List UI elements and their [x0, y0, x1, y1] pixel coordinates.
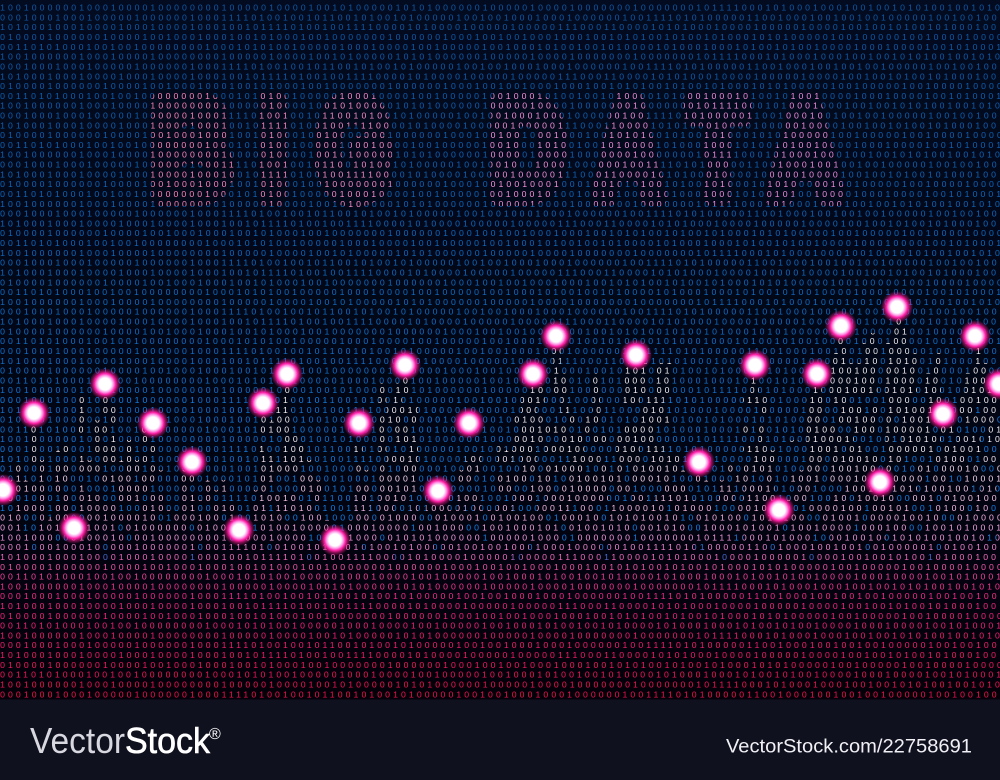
- binary digit matrix with hidden BIG DATA letters and column chart: 0001000100010000010000001000111101001001011001010010100000100100100010001000000100111101010000011001000100100100100000100100100: [0, 307, 1000, 317]
- binary digit matrix with hidden BIG DATA letters and column chart: 0100001000000100001001000100010010100010010000000100000010001001001000100010010101001010010100010101000001001000001001000010000: [0, 366, 1000, 376]
- binary digit matrix with hidden BIG DATA letters and column chart: 0001000100010000010000001000111101001001011001010010100000100100100010001000000100111101010000011001000100100100100000100100100: [0, 640, 1000, 650]
- binary digit matrix with hidden BIG DATA letters and column chart: 0011010100010010010000000010001010100100000100010000100100000100100010100100101000010100010001010010100100001000100001001010001: [0, 91, 1000, 101]
- footer band: [0, 700, 1000, 780]
- binary digit matrix with hidden BIG DATA letters and column chart: 0001000100010000010000001000111101001001011001010010100000100100100010001000000100111101010000011001000100100100100000100100100: [0, 591, 1000, 601]
- binary digit matrix with hidden BIG DATA letters and column chart: 0011010100010010010000000010001010100100000100010000100100000100100010100100101000010100010001010010100100001000100001001010001: [0, 670, 1000, 680]
- binary digit matrix with hidden BIG DATA letters and column chart: 1001000000100010000100000000100000100001001010000010101000000100000100001000000010000000101111000101000100010010010101001001010: [0, 297, 1000, 307]
- binary digit matrix with hidden BIG DATA letters and column chart: 1010001000100001000100001000100101111010010011110000101000010000010000011100011000010101000100001000001000010010010100101000100: [0, 71, 999, 81]
- binary digit matrix with hidden BIG DATA letters and column chart: 1001000000100010000100000000100000100001001010000010101000000100000100001000000010000000101111000101000100010010010101001001010: [0, 483, 1000, 493]
- binary digit matrix with hidden BIG DATA letters and column chart: 0100001000000100001001000100010010100010010000000100000010001001001000100010010101001010010100010101000001001000001001000010000: [0, 562, 1000, 572]
- binary digit matrix with hidden BIG DATA letters and column chart: 0001000100010000010000001000111101001001011001010010100000100100100010001000000100111101010000011001000100100100100000100100100: [0, 444, 1000, 454]
- binary digit matrix with hidden BIG DATA letters and column chart: 1010001000100001000100001000100101111010010011110000101000010000010000011100011000010101000100001000001000010010010100101000100: [0, 218, 999, 228]
- binary digit matrix with hidden BIG DATA letters and column chart: 1010001000100001000100001000100101111010010011110000101000010000010000011100011000010101000100001000001000010010010100101000100: [0, 356, 999, 366]
- binary digit matrix with hidden BIG DATA letters and column chart: 1010001000100001000100001000100101111010010011110000101000010000010000011100011000010101000100001000001000010010010100101000100: [0, 454, 999, 464]
- image id URL: VectorStock.com/22758691: [726, 736, 972, 758]
- binary digit matrix with hidden BIG DATA letters and column chart: 1001000000100010000100000000100000100001001010000010101000000100000100001000000010000000101111000101000100010010010101001001010: [0, 248, 1000, 258]
- binary digit matrix with hidden BIG DATA letters and column chart: 0001000100010000010000001000111101001001011001010010100000100100100010001000000100111101010000011001000100100100100000100100100: [0, 160, 1000, 170]
- binary digit matrix with hidden BIG DATA letters and column chart: 0001000100010000010000001000111101001001011001010010100000100100100010001000000100111101010000011001000100100100100000100100100: [0, 542, 1000, 552]
- binary digit matrix with hidden BIG DATA letters and column chart: 0001000100010000010000001000111101001001011001010010100000100100100010001000000100111101010000011001000100100100100000100100100: [0, 12, 1000, 22]
- binary digit matrix with hidden BIG DATA letters and column chart: 1010001000100001000100001000100101111010010011110000101000010000010000011100011000010101000100001000001000010010010100101000100: [0, 650, 999, 660]
- VectorStock logo: Vector: [30, 720, 125, 761]
- binary digit matrix with hidden BIG DATA letters and column chart: 1001000000100010000100000000100000100001001010000010101000000100000100001000000010000000101111000101000100010010010101001001010: [0, 532, 1000, 542]
- binary digit matrix with hidden BIG DATA letters and column chart: 0011010100010010010000000010001010100100000100010000100100000100100010100100101000010100010001010010100100001000100001001010001: [0, 424, 1000, 434]
- binary digit matrix with hidden BIG DATA letters and column chart: 1001000000100010000100000000100000100001001010000010101000000100000100001000000010000000101111000101000100010010010101001001010: [0, 199, 1000, 209]
- binary digit matrix with hidden BIG DATA letters and column chart: 1001000000100010000100000000100000100001001010000010101000000100000100001000000010000000101111000101000100010010010101001001010: [0, 630, 1000, 640]
- binary digit matrix with hidden BIG DATA letters and column chart: 1001000000100010000100000000100000100001001010000010101000000100000100001000000010000000101111000101000100010010010101001001010: [0, 679, 1000, 689]
- binary digit matrix with hidden BIG DATA letters and column chart: 0001000100010000010000001000111101001001011001010010100000100100100010001000000100111101010000011001000100100100100000100100100: [0, 61, 1000, 71]
- binary digit matrix with hidden BIG DATA letters and column chart: 0011010100010010010000000010001010100100000100010000100100000100100010100100101000010100010001010010100100001000100001001010001: [0, 287, 1000, 297]
- binary digit matrix with hidden BIG DATA letters and column chart: 0100001000000100001001000100010010100010010000000100000010001001001000100010010101001010010100010101000001001000001001000010000: [0, 513, 1000, 523]
- binary digit matrix with hidden BIG DATA letters and column chart: 0001000100010000010000001000111101001001011001010010100000100100100010001000000100111101010000011001000100100100100000100100100: [0, 209, 1000, 219]
- binary digit matrix with hidden BIG DATA letters and column chart: 0011010100010010010000000010001010100100000100010000100100000100100010100100101000010100010001010010100100001000100001001010001: [0, 572, 1000, 582]
- binary digit matrix with hidden BIG DATA letters and column chart: 1010001000100001000100001000100101111010010011110000101000010000010000011100011000010101000100001000001000010010010100101000100: [0, 317, 999, 327]
- binary digit matrix with hidden BIG DATA letters and column chart: 0100001000000100001001000100010010100010010000000100000010001001001000100010010101001010010100010101000001001000001001000010000: [0, 179, 1000, 189]
- VectorStock logo: ®: [209, 726, 221, 743]
- binary digit matrix with hidden BIG DATA letters and column chart: 1010001000100001000100001000100101111010010011110000101000010000010000011100011000010101000100001000001000010010010100101000100: [0, 405, 999, 415]
- binary digit matrix with hidden BIG DATA letters and column chart: 0001000100010000010000001000111101001001011001010010100000100100100010001000000100111101010000011001000100100100100000100100100: [0, 689, 1000, 699]
- binary digit matrix with hidden BIG DATA letters and column chart: 1001000000100010000100000000100000100001001010000010101000000100000100001000000010000000101111000101000100010010010101001001010: [0, 434, 1000, 444]
- binary digit matrix with hidden BIG DATA letters and column chart: 0001000100010000010000001000111101001001011001010010100000100100100010001000000100111101010000011001000100100100100000100100100: [0, 493, 1000, 503]
- binary digit matrix with hidden BIG DATA letters and column chart: 0100001000000100001001000100010010100010010000000100000010001001001000100010010101001010010100010101000001001000001001000010000: [0, 660, 1000, 670]
- binary digit matrix with hidden BIG DATA letters and column chart: 0011010100010010010000000010001010100100000100010000100100000100100010100100101000010100010001010010100100001000100001001010001: [0, 473, 1000, 483]
- binary digit matrix with hidden BIG DATA letters and column chart: 1010001000100001000100001000100101111010010011110000101000010000010000011100011000010101000100001000001000010010010100101000100: [0, 601, 999, 611]
- binary digit matrix with hidden BIG DATA letters and column chart: 0011010100010010010000000010001010100100000100010000100100000100100010100100101000010100010001010010100100001000100001001010001: [0, 523, 1000, 533]
- binary digit matrix with hidden BIG DATA letters and column chart: 1010001000100001000100001000100101111010010011110000101000010000010000011100011000010101000100001000001000010010010100101000100: [0, 267, 999, 277]
- binary digit matrix with hidden BIG DATA letters and column chart: 1010001000100001000100001000100101111010010011110000101000010000010000011100011000010101000100001000001000010010010100101000100: [0, 22, 999, 32]
- binary digit matrix with hidden BIG DATA letters and column chart: 0100001000000100001001000100010010100010010000000100000010001001001000100010010101001010010100010101000001001000001001000010000: [0, 415, 1000, 425]
- binary digit matrix with hidden BIG DATA letters and column chart: 0100001000000100001001000100010010100010010000000100000010001001001000100010010101001010010100010101000001001000001001000010000: [0, 81, 1000, 91]
- binary digit matrix with hidden BIG DATA letters and column chart: 1010001000100001000100001000100101111010010011110000101000010000010000011100011000010101000100001000001000010010010100101000100: [0, 503, 999, 513]
- binary digit matrix with hidden BIG DATA letters and column chart: 0001000100010000010000001000111101001001011001010010100000100100100010001000000100111101010000011001000100100100100000100100100: [0, 346, 1000, 356]
- binary digit matrix with hidden BIG DATA letters and column chart: 0001000100010000010000001000111101001001011001010010100000100100100010001000000100111101010000011001000100100100100000100100100: [0, 111, 1000, 121]
- binary digit matrix with hidden BIG DATA letters and column chart: 1001000000100010000100000000100000100001001010000010101000000100000100001000000010000000101111000101000100010010010101001001010: [0, 385, 1000, 395]
- VectorStock logo: [30, 720, 221, 761]
- binary digit matrix with hidden BIG DATA letters and column chart: 1010001000100001000100001000100101111010010011110000101000010000010000011100011000010101000100001000001000010010010100101000100: [0, 169, 999, 179]
- binary digit matrix with hidden BIG DATA letters and column chart: 1010001000100001000100001000100101111010010011110000101000010000010000011100011000010101000100001000001000010010010100101000100: [0, 120, 999, 130]
- binary digit matrix with hidden BIG DATA letters and column chart: 1001000000100010000100000000100000100001001010000010101000000100000100001000000010000000101111000101000100010010010101001001010: [0, 150, 1000, 160]
- VectorStock logo: Stock: [125, 720, 211, 761]
- binary digit matrix with hidden BIG DATA letters and column chart: 0011010100010010010000000010001010100100000100010000100100000100100010100100101000010100010001010010100100001000100001001010001: [0, 621, 1000, 631]
- binary digit matrix with hidden BIG DATA letters and column chart: 0001000100010000010000001000111101001001011001010010100000100100100010001000000100111101010000011001000100100100100000100100100: [0, 258, 1000, 268]
- binary digit matrix with hidden BIG DATA letters and column chart: 0100001000000100001001000100010010100010010000000100000010001001001000100010010101001010010100010101000001001000001001000010000: [0, 326, 1000, 336]
- binary digit matrix with hidden BIG DATA letters and column chart: 0001000100010000010000001000111101001001011001010010100000100100100010001000000100111101010000011001000100100100100000100100100: [0, 395, 1000, 405]
- binary digit matrix with hidden BIG DATA letters and column chart: 0100001000000100001001000100010010100010010000000100000010001001001000100010010101001010010100010101000001001000001001000010000: [0, 277, 1000, 287]
- binary digit matrix with hidden BIG DATA letters and column chart: 0011010100010010010000000010001010100100000100010000100100000100100010100100101000010100010001010010100100001000100001001010001: [0, 336, 1000, 346]
- binary digit matrix with hidden BIG DATA letters and column chart: 1001000000100010000100000000100000100001001010000010101000000100000100001000000010000000101111000101000100010010010101001001010: [0, 581, 1000, 591]
- binary digit matrix with hidden BIG DATA letters and column chart: 1001000000100010000100000000100000100001001010000010101000000100000100001000000010000000101111000101000100010010010101001001010: [0, 3, 1000, 13]
- binary digit matrix with hidden BIG DATA letters and column chart: 0011010100010010010000000010001010100100000100010000100100000100100010100100101000010100010001010010100100001000100001001010001: [0, 42, 1000, 52]
- binary digit matrix with hidden BIG DATA letters and column chart: 0100001000000100001001000100010010100010010000000100000010001001001000100010010101001010010100010101000001001000001001000010000: [0, 611, 1000, 621]
- binary digit matrix with hidden BIG DATA letters and column chart: 0100001000000100001001000100010010100010010000000100000010001001001000100010010101001010010100010101000001001000001001000010000: [0, 32, 1000, 42]
- binary digit matrix with hidden BIG DATA letters and column chart: 0100001000000100001001000100010010100010010000000100000010001001001000100010010101001010010100010101000001001000001001000010000: [0, 228, 1000, 238]
- glowing data points: [0, 291, 1000, 556]
- binary digit matrix with hidden BIG DATA letters and column chart: 0100001000000100001001000100010010100010010000000100000010001001001000100010010101001010010100010101000001001000001001000010000: [0, 130, 1000, 140]
- binary digit matrix with hidden BIG DATA letters and column chart: 0011010100010010010000000010001010100100000100010000100100000100100010100100101000010100010001010010100100001000100001001010001: [0, 189, 1000, 199]
- binary digit matrix with hidden BIG DATA letters and column chart: 0011010100010010010000000010001010100100000100010000100100000100100010100100101000010100010001010010100100001000100001001010001: [0, 140, 1000, 150]
- binary digit matrix with hidden BIG DATA letters and column chart: 0011010100010010010000000010001010100100000100010000100100000100100010100100101000010100010001010010100100001000100001001010001: [0, 375, 1000, 385]
- binary digit matrix with hidden BIG DATA letters and column chart: 0011010100010010010000000010001010100100000100010000100100000100100010100100101000010100010001010010100100001000100001001010001: [0, 238, 1000, 248]
- binary digit matrix with hidden BIG DATA letters and column chart: 1001000000100010000100000000100000100001001010000010101000000100000100001000000010000000101111000101000100010010010101001001010: [0, 52, 1000, 62]
- binary digit matrix with hidden BIG DATA letters and column chart: 0100001000000100001001000100010010100010010000000100000010001001001000100010010101001010010100010101000001001000001001000010000: [0, 464, 1000, 474]
- binary digit matrix with hidden BIG DATA letters and column chart: 1001000000100010000100000000100000100001001010000010101000000100000100001000000010000000101111000101000100010010010101001001010: [0, 101, 1000, 111]
- binary digit matrix with hidden BIG DATA letters and column chart: 1010001000100001000100001000100101111010010011110000101000010000010000011100011000010101000100001000001000010010010100101000100: [0, 552, 999, 562]
